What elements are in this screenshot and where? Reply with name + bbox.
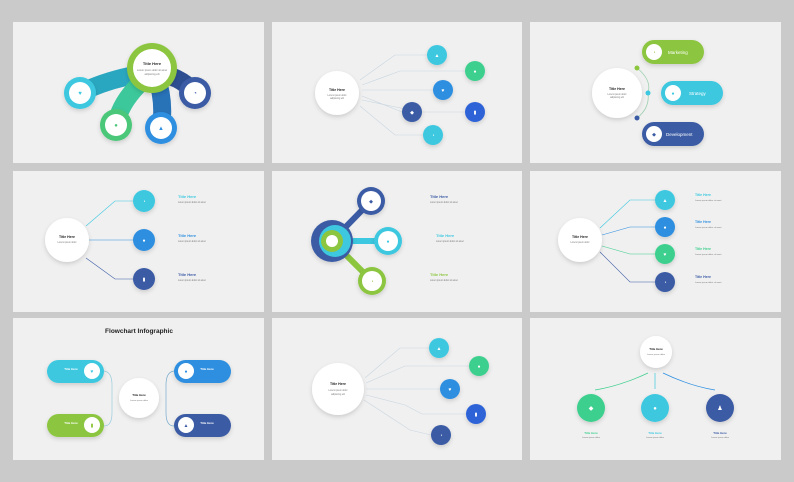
panel: slide 3 pills: adipiscing elit (610, 96, 624, 99)
panel: slide 6 four branches: Title Here (695, 193, 711, 197)
panel: slide 1 ring diagram (13, 22, 264, 163)
panel: slide 4 three branches: Title Here (178, 233, 197, 238)
panel: slide 4 three branches: Lorem ipsum dolor sit amet (178, 201, 206, 204)
panel: slide 9 tree: ● (653, 406, 657, 412)
panel: slide 8 branching lines: ◔ (439, 433, 443, 439)
panel: slide 4 three branches: ◔ (142, 199, 146, 205)
panel: slide 9 tree: ◆ (589, 406, 594, 412)
panel: slide 6 four branches: Title Here (695, 275, 711, 279)
panel: slide 6 four branches: ▲ (663, 198, 667, 204)
panel: slide 3 pills: Development (666, 132, 693, 137)
panel: slide 9 tree: Lorem ipsum dolor (582, 436, 600, 439)
panel: slide 8 branching lines: adipiscing elit (331, 393, 345, 396)
panel: slide 2 branching lines: ● (473, 69, 477, 75)
panel: slide 5 molecule: ◆ (369, 199, 373, 205)
panel: slide 6 four branches: Title Here (695, 220, 711, 224)
panel: slide 8 branching lines: ● (477, 364, 481, 370)
panel: slide 7 flowchart: Title Here (132, 393, 146, 397)
panel: slide 1 ring diagram: ♥ (78, 91, 82, 97)
panel: slide 9 tree: ♟ (717, 405, 723, 412)
panel: slide 1 ring diagram: ▲ (158, 126, 164, 132)
panel: slide 3 pills: Title Here (609, 87, 625, 91)
panel: slide 7 flowchart: Title Here (64, 421, 78, 425)
panel: slide 4 three branches: Lorem ipsum dolor sit amet (178, 240, 206, 243)
panel: slide 9 tree: Lorem ipsum dolor (646, 436, 664, 439)
panel: slide 3 pills: Lorem ipsum dolor (607, 93, 627, 96)
panel: slide 2 branching lines: Title Here (329, 88, 345, 92)
panel: slide 6 four branches: Lorem ipsum dolor sit amet (695, 253, 722, 256)
panel: slide 1 ring diagram: Lorem ipsum dolor sit amet (137, 69, 167, 72)
panel: slide 7 flowchart: Title Here (200, 421, 214, 425)
panel: slide 5 molecule: Lorem ipsum dolor sit amet (430, 279, 458, 282)
panel: slide 6 four branches (530, 171, 781, 312)
panel: slide 3 pills: ◆ (652, 132, 656, 138)
panel: slide 3 pills: ◔ (652, 50, 656, 56)
panel: slide 2 branching lines: ♥ (442, 88, 445, 94)
panel: slide 1 ring diagram: ● (114, 123, 118, 129)
panel: slide 5 molecule: Title Here (430, 272, 449, 277)
panel: slide 4 three branches: Lorem ipsum dolor sit amet (178, 279, 206, 282)
panel: slide 4 three branches: Title Here (59, 235, 75, 239)
panel: slide 6 four branches: Lorem ipsum dolor sit amet (695, 226, 722, 229)
panel: slide 3 pills: Strategy (689, 91, 707, 96)
panel: slide 7 flowchart: Title Here (64, 367, 78, 371)
panel: slide 8 branching lines: ♥ (449, 387, 452, 393)
panel: slide 5 molecule: Lorem ipsum dolor sit amet (430, 201, 458, 204)
panel: slide 2 branching lines: Lorem ipsum dolor (327, 94, 347, 97)
panel: slide 6 four branches: ● (663, 225, 667, 231)
panel: slide 8 branching lines: Title Here (330, 382, 346, 386)
panel: slide 9 tree: Title Here (649, 347, 663, 351)
panel: slide 8 branching lines: ▲ (437, 346, 441, 352)
panel: slide 4 three branches: Title Here (178, 272, 197, 277)
panel: slide 4 three branches (13, 171, 264, 312)
panel: slide 4 three branches: Lorem ipsum dolor (57, 241, 77, 244)
panel: slide 4 three branches: ● (142, 238, 146, 244)
panel: slide 9 tree: Title Here (648, 431, 662, 435)
panel: slide 4 three branches: ▮ (143, 277, 146, 283)
panel: slide 7 flowchart (13, 318, 264, 460)
panel: slide 9 tree: Lorem ipsum dolor (647, 353, 665, 356)
panel: slide 5 molecule: Title Here (436, 233, 455, 238)
panel: slide 6 four branches: Title Here (572, 235, 588, 239)
panel: slide 7 flowchart: Lorem ipsum dolor (130, 399, 148, 402)
panel: slide 9 tree: Lorem ipsum dolor (711, 436, 729, 439)
panel: slide 3 pills (530, 22, 781, 163)
panel: slide 2 branching lines: adipiscing elit (330, 97, 344, 100)
panel: slide 2 branching lines: ◆ (410, 110, 414, 116)
panel: slide 6 four branches: ♥ (664, 252, 667, 258)
panel: slide 7 flowchart: ▲ (184, 423, 188, 429)
panel: slide 2 branching lines: ▲ (435, 53, 439, 59)
panel: slide 5 molecule: Title Here (430, 194, 449, 199)
panel: slide 6 four branches: ◔ (663, 280, 667, 286)
panel: slide 3 pills: ● (671, 91, 675, 97)
panel: slide 2 branching lines: ▮ (474, 110, 477, 116)
panel: slide 6 four branches: Lorem ipsum dolor sit amet (695, 281, 722, 284)
panel: slide 5 molecule: Lorem ipsum dolor sit amet (436, 240, 464, 243)
panel: slide 6 four branches: Title Here (695, 247, 711, 251)
panel: slide 1 ring diagram: ◔ (193, 91, 197, 97)
panel: slide 7 flowchart: Flowchart Infographic (105, 328, 173, 335)
panel: slide 6 four branches: Lorem ipsum dolor (570, 241, 590, 244)
panel: slide 8 branching lines: Lorem ipsum dolor (328, 389, 348, 392)
panel: slide 6 four branches: Lorem ipsum dolor sit amet (695, 199, 722, 202)
icon circles (64, 43, 211, 144)
panel: slide 7 flowchart: ▮ (91, 423, 94, 429)
panel: slide 9 tree (530, 318, 781, 460)
panel: slide 8 branching lines (272, 318, 522, 460)
panel: slide 4 three branches: Title Here (178, 194, 197, 199)
connectors (80, 72, 195, 128)
panel: slide 9 tree: Title Here (584, 431, 598, 435)
panel: slide 2 branching lines: ◔ (431, 133, 435, 139)
panel: slide 5 molecule (272, 171, 522, 312)
panel: slide 5 molecule: ◔ (370, 279, 374, 285)
panel: slide 1 ring diagram: adipiscing elit (144, 73, 160, 76)
panel: slide 7 flowchart: ● (184, 369, 188, 375)
panel: slide 8 branching lines: ▮ (475, 412, 478, 418)
panel: slide 7 flowchart: Title Here (200, 367, 214, 371)
panel: slide 1 ring diagram: Title Here (143, 61, 162, 66)
panel: slide 3 pills: Marketing (668, 50, 688, 55)
panel: slide 2 branching lines (272, 22, 522, 163)
panel: slide 9 tree: Title Here (713, 431, 727, 435)
panel: slide 7 flowchart: ♥ (91, 369, 94, 375)
panel: slide 5 molecule: ● (386, 239, 390, 245)
